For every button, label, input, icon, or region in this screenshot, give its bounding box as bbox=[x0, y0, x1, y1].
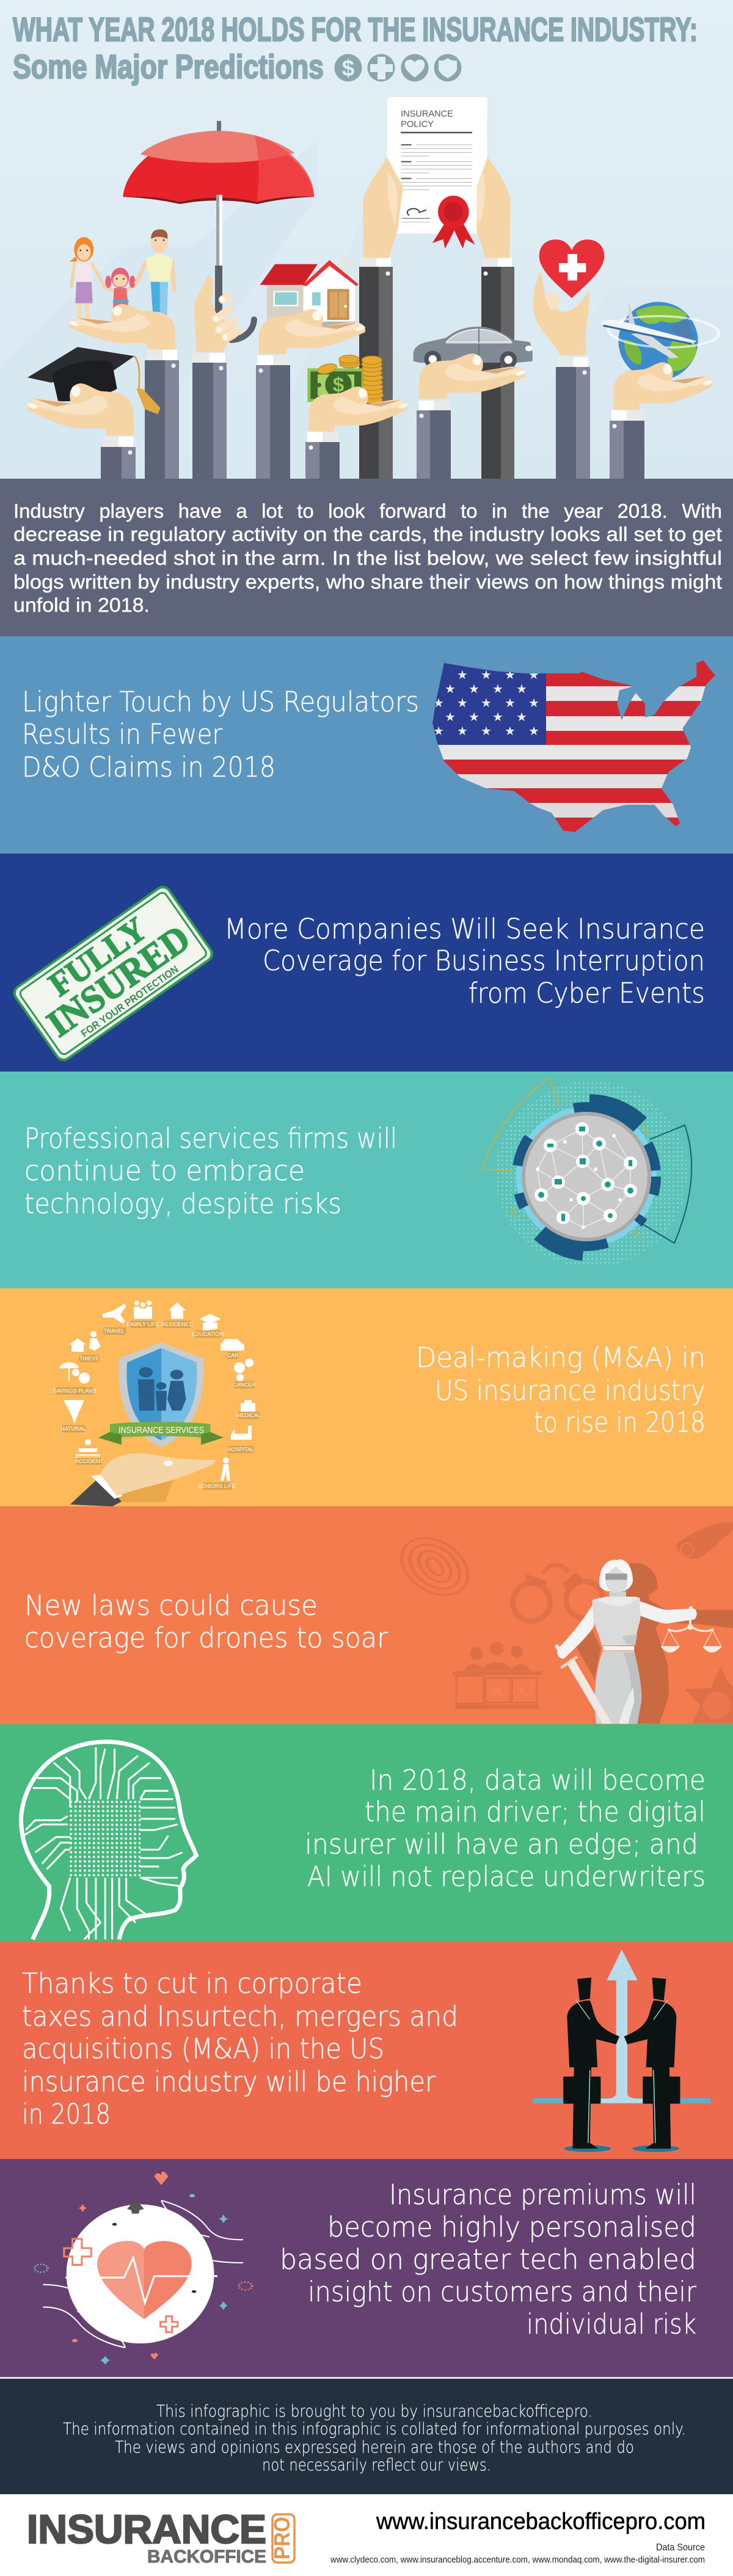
heading: become highly personalised bbox=[327, 2211, 696, 2243]
heading bbox=[24, 1589, 388, 1654]
heading: Thanks to cut in corporate bbox=[22, 1967, 362, 2000]
service labels: MEDICAL bbox=[236, 1412, 261, 1418]
lady justice figure bbox=[555, 1559, 733, 1724]
heading: Results in Fewer bbox=[22, 718, 222, 750]
USA flag map: ★ bbox=[516, 711, 527, 724]
intro text: unfold in 2018. bbox=[13, 594, 150, 616]
heading: Deal-making (M&A) in bbox=[416, 1341, 706, 1374]
heading: AI will not replace underwriters bbox=[307, 1860, 706, 1893]
USA flag map: ★ bbox=[469, 711, 480, 724]
umbrella bbox=[123, 121, 314, 314]
circuit head bbox=[21, 1742, 196, 1939]
hand holding graduation cap bbox=[27, 383, 134, 435]
panel: cyber events bbox=[0, 854, 733, 1072]
hand holding car bbox=[419, 354, 526, 399]
money and coins bbox=[307, 355, 384, 404]
heading: in 2018 bbox=[22, 2098, 111, 2130]
heading bbox=[416, 1341, 706, 1439]
panel: data and AI bbox=[0, 1724, 733, 1942]
arm: globe hand sleeve bbox=[610, 410, 644, 480]
house bbox=[260, 258, 359, 328]
globe and airplane bbox=[600, 300, 720, 380]
heading bbox=[280, 2179, 696, 2340]
title: Some Major Predictions bbox=[13, 48, 324, 85]
heading bbox=[224, 913, 705, 1009]
disclaimer text: This infographic is brought to you by insurancebackofficepro. bbox=[156, 2402, 593, 2421]
heading: Coverage for Business Interruption bbox=[263, 945, 705, 977]
heading: to rise in 2018 bbox=[534, 1406, 706, 1439]
logo: BACKOFFICE bbox=[147, 2547, 266, 2567]
service labels: THIEVE bbox=[79, 1355, 99, 1362]
service labels: TRAVEL bbox=[104, 1328, 125, 1334]
hand holding money bbox=[308, 386, 408, 432]
USA flag map: ★ bbox=[481, 725, 492, 738]
arm: house hand sleeve bbox=[256, 355, 290, 480]
service labels bbox=[53, 1321, 261, 1490]
disclaimer text bbox=[63, 2402, 686, 2475]
heading: individual risk bbox=[527, 2308, 696, 2340]
heading: US insurance industry bbox=[435, 1374, 706, 1407]
intro text bbox=[13, 500, 722, 616]
USA flag map: ★ bbox=[492, 683, 503, 696]
heading: coverage for drones to soar bbox=[24, 1622, 388, 1654]
divider line bbox=[0, 2377, 733, 2379]
arm: umbrella hand sleeve bbox=[192, 353, 227, 480]
service labels: FAMILY LIFE bbox=[127, 1321, 159, 1327]
USA flag map: ★ bbox=[505, 669, 516, 682]
hand holding house bbox=[259, 309, 366, 354]
USA flag map: ★ bbox=[505, 697, 516, 710]
arm: left policy hand sleeve bbox=[359, 257, 393, 480]
family figures bbox=[70, 230, 174, 319]
heading: continue to embrace bbox=[24, 1155, 305, 1187]
heading bbox=[22, 686, 419, 783]
heading: Professional services firms will bbox=[24, 1122, 397, 1155]
service labels: RESIDENCE bbox=[161, 1321, 193, 1327]
intro text: a much-needed shot in the arm. In the list below, we select few insightful bbox=[13, 547, 722, 569]
panel: lighter touch bbox=[0, 636, 733, 854]
money and coins: $ bbox=[333, 374, 345, 397]
heading: insurer will have an edge; and bbox=[305, 1828, 698, 1860]
intro text: decrease in regulatory activity on the cards, the industry looks all set to get bbox=[13, 523, 722, 545]
disclaimer text: not necessarily reflect our views. bbox=[262, 2456, 491, 2475]
heading: acquisitions (M&A) in the US bbox=[22, 2033, 384, 2065]
hand holding family bbox=[68, 304, 175, 349]
USA flag map: ★ bbox=[433, 725, 444, 738]
intro text: Industry players have a lot to look forward to in the year 2018. With bbox=[13, 500, 722, 522]
heart and hand bbox=[533, 239, 604, 355]
heading: New laws could cause bbox=[24, 1589, 318, 1622]
arm: family hand sleeve bbox=[145, 350, 179, 480]
USA flag map: ★ bbox=[445, 683, 456, 696]
heading: from Cyber Events bbox=[469, 977, 705, 1009]
stamp: fully insured bbox=[10, 882, 216, 1065]
USA flag map: ★ bbox=[445, 711, 456, 724]
heading: insurance industry will be higher bbox=[22, 2066, 436, 2098]
service labels: HOSPITAL bbox=[227, 1446, 254, 1453]
logo bbox=[27, 2506, 294, 2567]
heading bbox=[305, 1764, 706, 1893]
USA flag map: ★ bbox=[528, 669, 539, 682]
website url: www.insurancebackofficepro.com bbox=[376, 2509, 706, 2534]
arm: car hand sleeve bbox=[417, 401, 451, 480]
ribbon label: INSURANCE SERVICES bbox=[119, 1425, 204, 1435]
icons: dollar, cross, heart, shield bbox=[335, 54, 462, 82]
heading bbox=[22, 1967, 458, 2130]
insurance policy document with hands bbox=[363, 97, 511, 258]
USA flag map: ★ bbox=[433, 697, 444, 710]
stamp: fully insured: FULLY bbox=[42, 910, 154, 1004]
arm: right policy hand sleeve bbox=[481, 257, 514, 480]
heading: Insurance premiums will bbox=[389, 2179, 696, 2211]
panel: disclaimer bbox=[0, 2379, 733, 2494]
heading: taxes and Insurtech, mergers and bbox=[22, 2000, 458, 2033]
stamp: fully insured: FOR YOUR PROTECTION bbox=[79, 963, 181, 1039]
service labels: EDUCATION bbox=[192, 1331, 224, 1337]
service labels: CANCER bbox=[233, 1382, 256, 1388]
USA flag map: ★ bbox=[481, 697, 492, 710]
heading: technology, despite risks bbox=[24, 1188, 341, 1220]
faint fingerprint bbox=[390, 1533, 480, 1600]
heart health illustration bbox=[35, 2172, 252, 2365]
microchip dot grid bbox=[68, 1801, 140, 1876]
service labels: CAR bbox=[227, 1352, 239, 1359]
hand holding shield bbox=[70, 1453, 216, 1506]
panel: personalised premiums bbox=[0, 2159, 733, 2377]
service labels: ACCIDENT bbox=[75, 1458, 103, 1464]
technology globe network bbox=[483, 1078, 691, 1267]
heading: the main driver; the digital bbox=[365, 1796, 706, 1828]
USA flag map: ★ bbox=[457, 725, 468, 738]
service labels: SAVINGS PLANS bbox=[53, 1388, 97, 1394]
panel: technology bbox=[0, 1072, 733, 1288]
arm: money hand sleeve bbox=[305, 432, 340, 480]
heading: Lighter Touch by US Regulators bbox=[22, 686, 419, 718]
logo: PRO bbox=[269, 2517, 294, 2560]
panel: deal-making bbox=[0, 1288, 733, 1506]
handshake with arrow bbox=[533, 1950, 710, 2152]
heading bbox=[24, 1122, 397, 1220]
logo: INSURANCE bbox=[27, 2506, 266, 2552]
hand holding globe bbox=[613, 362, 713, 410]
surrounding service icons bbox=[59, 1301, 255, 1481]
USA flag map: ★ bbox=[516, 683, 527, 696]
panel: introduction bbox=[0, 480, 733, 636]
stamp: fully insured: INSURED bbox=[40, 917, 197, 1045]
USA flag map: ★ bbox=[457, 669, 468, 682]
bottom strip of hero bbox=[0, 479, 733, 481]
panel: footer bbox=[0, 2494, 733, 2576]
USA flag map: ★ bbox=[469, 683, 480, 696]
shield bbox=[98, 1343, 224, 1448]
title bbox=[13, 10, 698, 85]
heading: based on greater tech enabled bbox=[280, 2243, 696, 2276]
graduation cap bbox=[27, 347, 161, 414]
heading: More Companies Will Seek Insurance bbox=[224, 913, 705, 945]
insurance services shield diagram bbox=[53, 1301, 261, 1506]
panel: drones and justice bbox=[0, 1506, 733, 1724]
heading: D&O Claims in 2018 bbox=[22, 751, 275, 783]
arm: heart hand sleeve bbox=[556, 357, 590, 480]
heading: insight on customers and their bbox=[308, 2276, 696, 2308]
USA flag map: ★ bbox=[492, 711, 503, 724]
hand holding umbrella bbox=[194, 274, 254, 352]
icons: dollar, cross, heart, shield: $ bbox=[342, 56, 355, 81]
arm: graduation cap hand sleeve bbox=[101, 437, 136, 480]
USA flag map: ★ bbox=[457, 697, 468, 710]
panel: hero illustration bbox=[0, 0, 733, 481]
USA flag map: ★ bbox=[505, 725, 516, 738]
policy document title: POLICY bbox=[401, 119, 434, 129]
car bbox=[414, 327, 533, 368]
intro text: blogs written by industry experts, who share their views on how things might bbox=[13, 571, 722, 593]
policy document title bbox=[401, 109, 453, 129]
disclaimer text: The views and opinions expressed herein are those of the authors and do bbox=[115, 2438, 634, 2457]
data source bbox=[330, 2542, 705, 2565]
faint handcuffs, jury, scroll, badge bbox=[453, 1522, 733, 1724]
heading: In 2018, data will become bbox=[370, 1764, 706, 1796]
USA flag map: ★ bbox=[528, 725, 539, 738]
USA flag map: ★ bbox=[481, 669, 492, 682]
service labels: NATURAL bbox=[60, 1426, 86, 1432]
data source: Data Source bbox=[656, 2542, 705, 2553]
USA flag map: ★ bbox=[528, 697, 539, 710]
service labels: SENIORS LIFE bbox=[198, 1483, 236, 1489]
panel: mergers and acquisitions bbox=[0, 1942, 733, 2159]
policy document title: INSURANCE bbox=[401, 109, 453, 119]
USA flag map bbox=[428, 656, 721, 836]
